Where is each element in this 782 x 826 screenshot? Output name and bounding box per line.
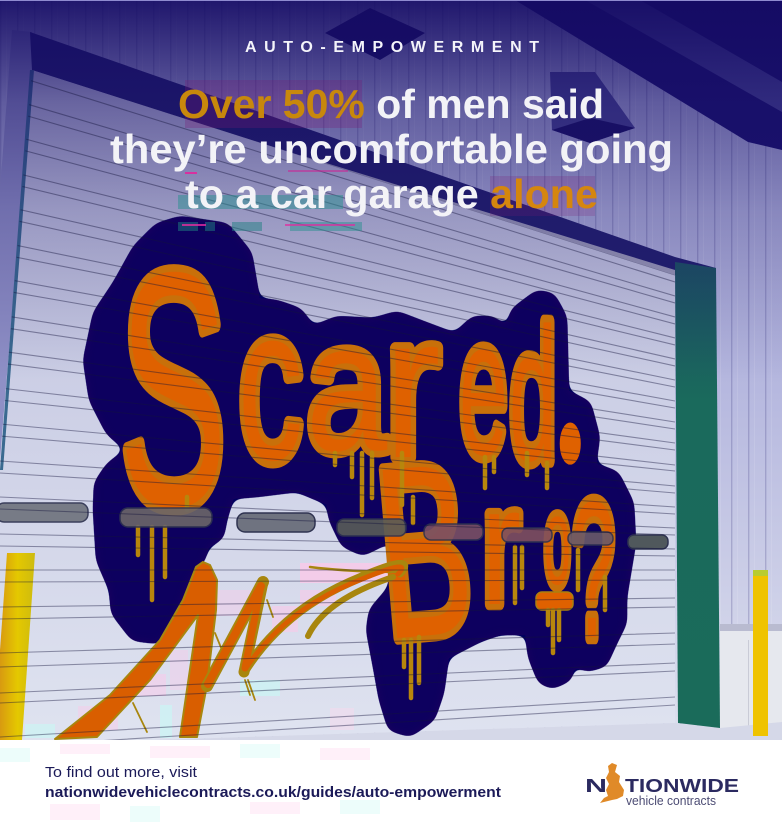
concrete base right of the door bbox=[720, 624, 782, 730]
soffit roof underside bbox=[515, 0, 782, 150]
door header recess bbox=[30, 32, 716, 275]
graffiti lettering: Scared.: c bbox=[238, 261, 303, 506]
header lip highlight bbox=[300, 155, 675, 277]
top edge highlight bbox=[0, 0, 782, 1]
graffiti lettering: Bro?: r bbox=[481, 451, 521, 641]
graffiti lettering: Scared. bbox=[119, 202, 587, 576]
graffiti lettering: Scared.: d bbox=[509, 289, 557, 501]
graffiti lettering: Scared.: S bbox=[119, 202, 227, 576]
logo tagline: vehicle contracts bbox=[626, 793, 716, 808]
wall vent diamond bbox=[325, 8, 425, 60]
roof beam bbox=[585, 0, 782, 112]
left door guide bbox=[0, 70, 34, 470]
yellow bollard left bbox=[0, 553, 35, 740]
footer intro line: To find out more, visit bbox=[45, 765, 197, 781]
green door jamb bbox=[675, 262, 720, 728]
graffiti lettering: Scared.: e bbox=[459, 279, 508, 497]
logo wordmark: TIONWIDE bbox=[625, 776, 739, 796]
wall vent box shadow bbox=[552, 118, 635, 143]
footer panel bbox=[0, 740, 782, 826]
highlight block behind alone bbox=[490, 176, 595, 216]
yellow bollard right bbox=[753, 570, 768, 736]
logo wordmark bbox=[585, 776, 739, 796]
graffiti lettering: Bro?: ? bbox=[571, 460, 615, 679]
arrow tag graffiti bbox=[55, 562, 404, 739]
graffiti lettering: Scared.: . bbox=[554, 231, 587, 518]
top darkening overlay bbox=[0, 0, 782, 380]
highlight block behind Over 50% bbox=[185, 80, 362, 128]
logo wordmark: N bbox=[585, 776, 607, 796]
door frame on the left bbox=[0, 30, 32, 460]
door slat lines bbox=[0, 59, 675, 747]
graffiti background blob bbox=[85, 218, 634, 735]
compression ghost marks below headline bbox=[178, 170, 362, 231]
compression glitch patches around arrow bbox=[25, 563, 392, 738]
section label: AUTO-EMPOWERMENT bbox=[245, 39, 539, 56]
arrow tag first strokes bbox=[55, 562, 217, 739]
graffiti lettering: Scared.: r bbox=[384, 272, 441, 501]
headline line three: to a car garage alone bbox=[185, 171, 598, 217]
paint drips bbox=[138, 453, 605, 698]
graffiti lettering: Bro? bbox=[367, 411, 615, 692]
underline of the letter o bbox=[536, 592, 573, 610]
headline line two: they’re uncomfortable going bbox=[110, 126, 673, 172]
door window slots bbox=[0, 503, 668, 549]
roller door bbox=[0, 70, 675, 745]
graffiti lettering: Scared.: a bbox=[306, 285, 388, 490]
footer call to action bbox=[45, 765, 501, 801]
footer url: nationwidevehiclecontracts.co.uk/guides/auto-empowerment bbox=[45, 784, 501, 801]
graffiti lettering: Bro?: o bbox=[544, 472, 571, 612]
logo: Nationwide Vehicle Contracts bbox=[585, 763, 739, 808]
graffiti lettering: Bro?: B bbox=[367, 411, 482, 692]
arrow tag strokes and sweep bbox=[133, 564, 404, 732]
wall vent box bbox=[550, 72, 635, 143]
footer compression tint bbox=[0, 744, 380, 822]
logo UK map icon bbox=[600, 763, 624, 803]
headline line one: Over 50% of men said bbox=[178, 81, 604, 127]
ground floor strip bbox=[0, 722, 782, 745]
headline bbox=[110, 81, 673, 217]
